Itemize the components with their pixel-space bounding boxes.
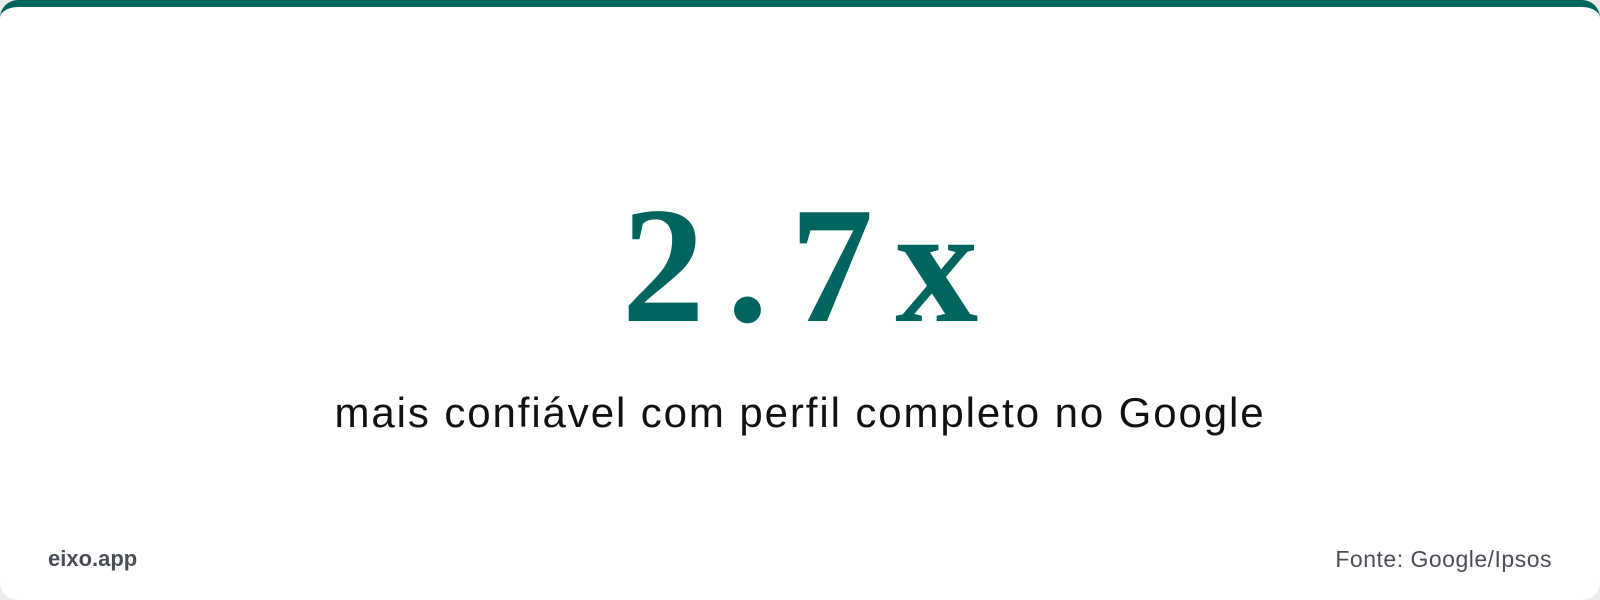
footer brand: eixo.app: [48, 546, 137, 571]
big stat: 2.7x: [622, 173, 1000, 357]
subtitle: mais confiável com perfil completo no Google: [334, 389, 1266, 436]
footer source: Fonte: Google/Ipsos: [1335, 546, 1552, 572]
